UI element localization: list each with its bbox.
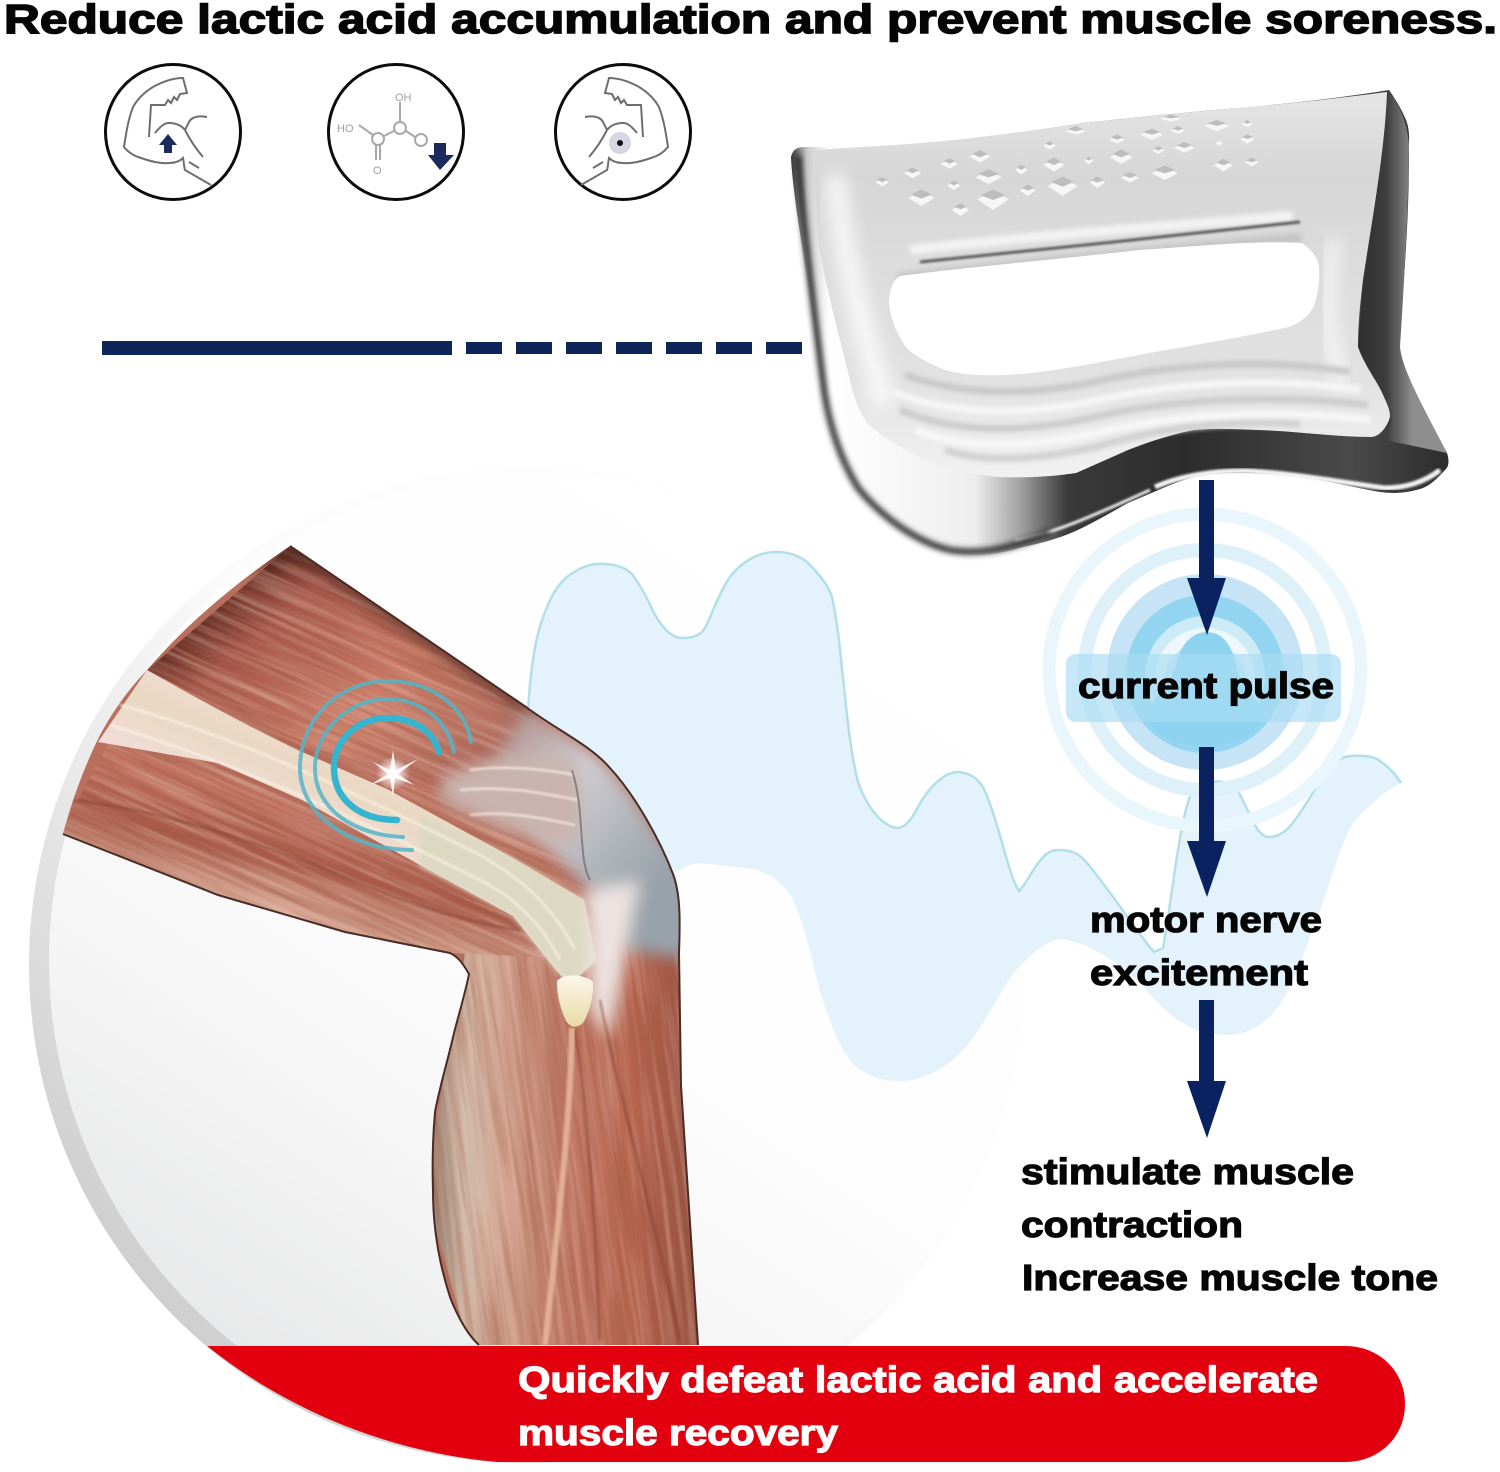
tool grip ridge above hole (910, 216, 1293, 250)
text: motor nerve excitement (1090, 899, 1322, 993)
text: muscle effects: Increase muscle tone (1022, 1257, 1438, 1298)
knee white fan (585, 880, 640, 1040)
tool left and lower edge (798, 155, 1050, 552)
icon: spark star (370, 750, 418, 797)
blue wave (454, 552, 1401, 1081)
tool grip dots (875, 114, 1259, 216)
pale quad fibres (440, 757, 582, 845)
tool soft highlights (835, 175, 885, 405)
panel: background circle (29, 467, 1025, 1463)
icon: pulse bell (1148, 632, 1262, 746)
upper thigh muscle (147, 546, 494, 760)
tool top face (815, 92, 1390, 477)
text: motor nerve excitement: excitement (1090, 952, 1308, 993)
icon: muscle with target dot (556, 64, 690, 200)
icon: lactic acid molecule with down arrow (328, 64, 464, 200)
arrow: tool to current pulse (1187, 480, 1226, 635)
arrow: nerve to muscle (1187, 1000, 1226, 1138)
text: muscle effects: stimulate muscle (1021, 1151, 1354, 1192)
tool bottom white rim (1155, 470, 1440, 488)
tendon band (98, 670, 596, 985)
down arrow (428, 143, 454, 170)
thigh fibre texture (64, 547, 586, 958)
icon: current pulse rings (1049, 514, 1361, 826)
knee outline (63, 546, 698, 1345)
icon: lactic acid molecule with down arrow: HO (337, 123, 354, 135)
thigh top shadow (240, 550, 540, 712)
icon: lactic acid molecule with down arrow: OH (395, 92, 412, 104)
icon: lactic acid molecule with down arrow: O (373, 165, 382, 177)
text: muscle effects (1021, 1151, 1438, 1298)
panel: knee muscle anatomy (63, 546, 697, 1345)
knee cap (557, 975, 593, 1027)
label box: current pulse (1066, 654, 1341, 722)
text: muscle effects: contraction (1021, 1204, 1243, 1245)
tool finger hole (889, 242, 1319, 375)
shin muscle (606, 952, 697, 1345)
tool outer body (791, 90, 1448, 555)
lower leg fibres (434, 949, 697, 1345)
tool right dark side (1358, 92, 1447, 453)
product: metal scraping tool (791, 90, 1448, 555)
calf muscle (434, 954, 559, 1345)
icon: teal spiral (300, 681, 471, 850)
dashed connector line (102, 341, 802, 355)
text: current pulse: current pulse (1078, 665, 1334, 706)
red banner (207, 1346, 1405, 1462)
knee cap tissue (490, 707, 695, 960)
tibial tendon (545, 1028, 572, 1345)
text: motor nerve excitement: motor nerve (1090, 899, 1322, 940)
red banner: muscle recovery (518, 1412, 838, 1453)
lower hamstring (63, 754, 542, 957)
icon: muscle with up arrow (106, 64, 240, 200)
red banner: Quickly defeat lactic acid and accelerate (518, 1359, 1318, 1400)
arrow: pulse to motor nerve (1187, 747, 1226, 897)
thigh muscles and fibres (63, 546, 586, 958)
up arrow (159, 134, 177, 153)
muscle fibres (70, 800, 680, 1340)
tool ripple lines (893, 364, 1370, 458)
